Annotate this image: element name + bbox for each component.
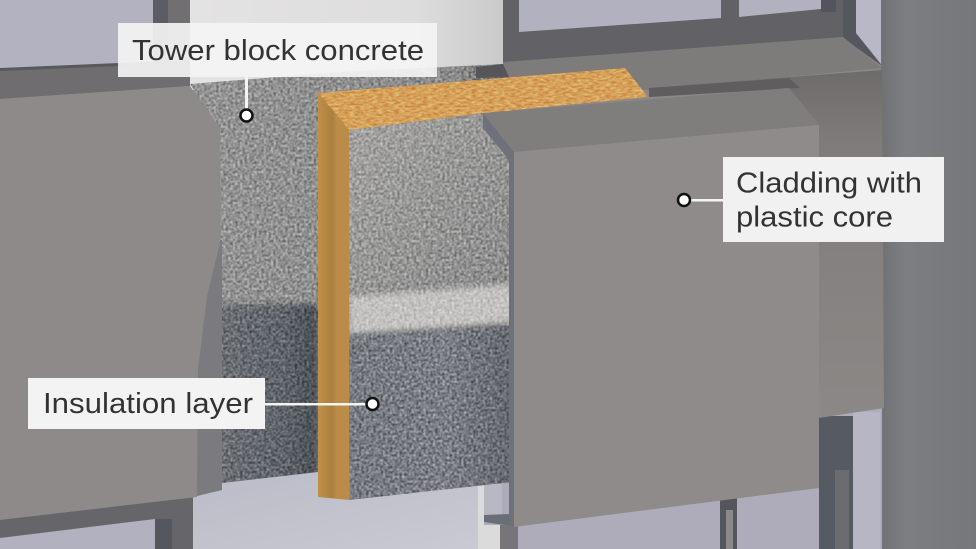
label: cladding with plastic core: plastic core [736,202,893,234]
window: lower left [0,496,193,549]
window: upper left [0,0,190,99]
layer: timber batten [318,68,648,500]
insulation upper section [349,105,514,305]
timber top face [318,68,648,130]
label: insulation layer: Insulation layer [43,388,253,420]
cladding front face [514,125,819,527]
cladding top face [483,88,819,152]
window: upper right with frame [503,0,882,66]
right wall column [881,0,976,549]
layer: tower block concrete [190,60,520,494]
cladding bottom bracket [484,514,512,526]
left cladding panel [0,86,222,520]
concrete lit area [190,60,520,320]
insulation shaded section [349,324,514,505]
insulation lit band [349,284,514,335]
timber front face [318,93,349,500]
cladding side edge [483,113,514,527]
layer: insulation [349,105,514,505]
window: lower right [478,400,882,549]
cladding: sill and back panel [500,37,884,418]
concrete dark corner [476,64,509,78]
label: tower block concrete [118,23,437,122]
label: cladding with plastic core [678,157,944,242]
main cladding panel [483,88,819,527]
concrete shaded area [222,300,318,483]
label: cladding with plastic core: Cladding with [736,168,922,200]
upper wall surface [190,0,510,90]
label: tower block concrete: Tower block concrete [132,35,424,67]
lower wall surface [190,470,490,549]
label: insulation layer [28,378,378,429]
